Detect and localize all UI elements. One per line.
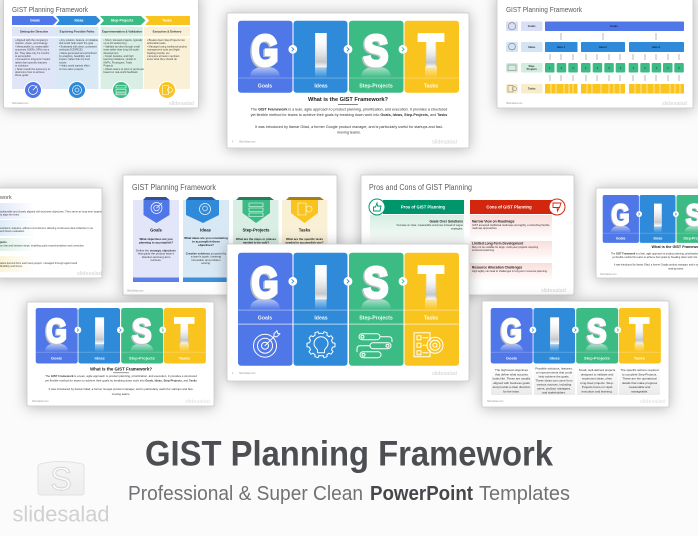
body text: It was introduced by Itamar Gilad, a former Google product manager, and is particularly useful for startups and fast- (255, 125, 444, 129)
card: tasks (282, 197, 328, 282)
column: tasks: backlog boards, etc. (147, 51, 170, 55)
column: ideas: impact, rather than by loud (59, 57, 90, 61)
description: tasks: The specific actions required (620, 368, 659, 372)
panel: front center slide, GIST with icons (227, 244, 469, 381)
GIST letter blocks (36, 308, 206, 363)
description: tasks: to complete Step-Projects. (622, 372, 657, 376)
footer: 4 (232, 140, 234, 144)
rows: solutions, features, without commitment, allowing continuous idea collection in an (0, 226, 94, 230)
watermark: slidesalad (541, 288, 566, 294)
main title: GIST Planning Framework (145, 434, 553, 474)
watermark: slidesalad (77, 271, 102, 277)
GIST letter blocks: G (46, 313, 67, 351)
cons column: GIST accepted traditional roadmaps and agility, a refreshing flexible (472, 223, 550, 227)
GIST letter blocks: G (252, 259, 278, 308)
heading: What is the GIST Framework? (308, 97, 388, 103)
body text: moving teams. (337, 131, 361, 135)
card: goals: Define the strategic objectives (136, 248, 176, 252)
GIST letter blocks: G (612, 200, 630, 232)
column: ideas: • Any solution, feature, or initiative (59, 38, 99, 42)
logo: slidesalad: slidesalad (12, 502, 110, 526)
footer (232, 371, 457, 377)
pros column: Goals Over Solutions (429, 220, 463, 224)
column: ideas: • Helps avoid wasted effort (59, 64, 90, 68)
body text: moving teams. (668, 268, 684, 270)
GIST letter blocks (238, 253, 459, 366)
body text: The GIST Framework is a lean, agile approach to product planning, prioritization, and execution. It provides a structured (45, 374, 197, 378)
row icons and labels: Step- (528, 64, 535, 68)
card: step-projects: needed to be safe? (243, 241, 269, 245)
slide title: GIST Planning Framework (132, 183, 217, 192)
column: step-projects: Projects (104, 64, 114, 68)
row icons and labels: Tasks (528, 87, 536, 91)
description: tasks: These are the operational (622, 377, 657, 381)
ideas bars: Idea 2 (599, 45, 607, 49)
slide title: Pros and Cons of GIST Planning (369, 183, 472, 192)
GIST letter blocks: Step-Projects (359, 315, 393, 321)
cons column: May not be suitable for large, multi-year projects requiring (472, 245, 539, 249)
step-project squares: 3 (656, 66, 658, 70)
pros column: strategies. (451, 226, 463, 230)
description: goals: aligned with business goals (493, 381, 530, 385)
row icons and labels (506, 22, 542, 94)
card: ideas: What ideas are you considering (184, 236, 228, 240)
column: step-projects: • Small, iterative, and high (104, 54, 134, 58)
icon: step-projects badge (112, 81, 130, 99)
GIST letter blocks: T (419, 258, 443, 307)
footer: SlideSalad.com (32, 400, 49, 403)
ideas bars: Idea 3 (652, 45, 660, 49)
icon: tasks badge (158, 81, 176, 99)
card: ideas: a team's goals, fostering (191, 255, 222, 259)
column: tasks: management tools and Agile (147, 48, 180, 52)
column: tasks: actionable tasks (147, 41, 166, 45)
ideas bars (545, 42, 684, 52)
footer: SlideSalad.com (12, 102, 29, 105)
GIST letter blocks: Goals (616, 236, 626, 240)
column: step-projects: tests rather than long full-scale (104, 48, 139, 52)
description: tasks (619, 366, 660, 395)
rows: achievable and closely aligned with business objectives. They serve as long-term targets (0, 210, 102, 214)
column: ideas: that could help reach the goal (59, 41, 93, 45)
panel: top-left slide, framework table (4, 0, 198, 108)
GIST letter blocks: S (362, 28, 387, 76)
footer: SlideSalad.com (127, 290, 144, 292)
icon: checklist target (414, 333, 443, 357)
column: goals: • Focused on long-term impact (15, 57, 50, 61)
column: goals: determine how to achieve (15, 70, 45, 74)
step-project squares: 4 (620, 66, 622, 70)
icon: goals badge (24, 81, 42, 99)
column: goals: list. They take only 12 months (15, 51, 50, 55)
column: step-projects: • Short, focused projects, typically (104, 38, 143, 42)
GIST letter blocks (238, 21, 459, 93)
column: tasks: know what they should do (147, 57, 177, 61)
card: tasks: What are the specific tasks (286, 237, 323, 241)
card: tasks: Tasks (299, 228, 311, 232)
goals bar (545, 22, 684, 31)
footer: slidesalad (432, 371, 457, 377)
icon: lightbulb gear (307, 332, 335, 358)
footer: slidesalad (169, 101, 194, 107)
GIST letter blocks: S (586, 313, 605, 351)
chevron header row: Step-Projects (111, 19, 133, 23)
step-project squares: 2 (644, 66, 646, 70)
footer: SlideSalad.com (239, 372, 256, 375)
cons column: High agility can lead to challenges in long-term resource planning. (472, 269, 548, 273)
GIST letter blocks: Step-Projects (129, 355, 156, 360)
column: ideas: • Ideas generated and prioritized (59, 51, 97, 55)
panel: far-right slide, what is GIST cropped (596, 188, 698, 278)
card: ideas: innovation and problem (191, 258, 221, 262)
body text: moving teams. (112, 392, 130, 396)
chevron header row: Ideas (75, 19, 84, 23)
footer: slidesalad (640, 399, 665, 405)
description: step-projects: Projects focus on rapid (582, 385, 613, 389)
GIST letter blocks: Ideas (314, 315, 328, 321)
column: tasks: Execution & Delivery (153, 30, 182, 34)
card: step-projects: What are the steps or phases (236, 237, 276, 241)
icon: step flow (357, 334, 392, 358)
step-project squares: 1 (633, 66, 635, 70)
footer: slidesalad (662, 101, 687, 107)
description: step-projects: long-lived projects. Step- (580, 381, 614, 385)
column: goals: to accomplish (15, 54, 31, 58)
step-project squares (545, 63, 684, 72)
pros column: Pros of GIST Planning (401, 204, 446, 210)
description: step-projects: Small, well-defined projects (579, 368, 616, 372)
card: goals: What objectives are you (139, 237, 173, 241)
GIST letter blocks: G (252, 27, 278, 76)
description: ideas: various sources, including (537, 382, 572, 386)
column: goals: • Team needs the autonomy to (15, 67, 51, 71)
column: goals: or solutions (15, 64, 29, 68)
GIST letter blocks: Tasks (424, 315, 438, 321)
GIST letter blocks: S (362, 259, 387, 308)
footer (506, 101, 687, 107)
description: step-projects: designed to validate and (581, 372, 614, 376)
column: goals: outcomes (OKRs, KPIs) not a (15, 48, 50, 52)
body text: yet flexible method for teams to achieve their goals by breaking down work into Goals, Ideas, Step-Projects, and Tasks (45, 379, 197, 383)
subtitle: Professional & Super Clean (128, 483, 363, 505)
step-project squares: 3 (608, 66, 610, 70)
card: goals (133, 197, 179, 282)
subtitle: PowerPoint (370, 483, 473, 505)
body text (251, 107, 447, 135)
cons column: Limited Long-Term Development (472, 242, 524, 246)
GIST letter blocks: S (587, 313, 607, 351)
GIST letter blocks: G (250, 259, 277, 308)
card: ideas: solving. (201, 261, 211, 265)
subtitle: Templates (479, 483, 570, 505)
footer (232, 140, 457, 146)
chevron header row: Tasks (162, 19, 172, 23)
column: goals: rather than specific features (15, 60, 48, 64)
column: step-projects: MVPs, Prototypes, Trials (104, 60, 133, 64)
description: tasks: manageable. (631, 390, 648, 394)
column: step-projects: Experimentation & Validation (102, 30, 142, 34)
GIST letter blocks: Step-Projects (584, 355, 611, 360)
pros column (369, 199, 464, 245)
rows: on fast and iterative steps, enabling quick experimentation and correction (0, 244, 84, 248)
description: ideas: help achieve the goals. (539, 374, 570, 378)
GIST letter blocks: Tasks (634, 355, 646, 360)
body text (611, 252, 698, 270)
GIST letter blocks: G (501, 313, 522, 351)
description: tasks: details that make progress (622, 381, 658, 385)
footer: SlideSalad.com (506, 102, 523, 105)
panel: top-right slide, hierarchy tree (497, 0, 693, 108)
GIST letter blocks (491, 308, 661, 363)
description: ideas: Possible solutions, features, (535, 366, 573, 370)
column: step-projects: • Validate an idea through small (104, 44, 140, 48)
column: ideas (56, 27, 99, 89)
description: ideas: users, product managers, (537, 386, 571, 390)
connectors (550, 33, 679, 81)
GIST letter blocks: Ideas (549, 355, 560, 360)
card: goals: success. (151, 258, 162, 262)
description: tasks: measurable and (629, 385, 651, 389)
row icons and labels: Projects (527, 67, 537, 71)
slide title: GIST Planning Framework (12, 5, 88, 14)
GIST letter blocks: G (611, 200, 629, 232)
footer: SlideSalad.com (487, 400, 504, 403)
panel: bottom-right slide, GIST with descriptions (482, 301, 669, 407)
card: ideas (183, 197, 229, 282)
GIST letter blocks: S (131, 313, 150, 351)
column: goals: • Aligned with the company's (15, 38, 49, 42)
column: ideas: methods (ICE/RICE) (59, 48, 83, 52)
heading: What is the GIST Framework? (90, 366, 152, 372)
GIST letter blocks: Goals (51, 355, 63, 360)
column: step-projects: based on real-world feedback (104, 70, 138, 74)
rows: and future evaluation. (0, 229, 25, 233)
GIST letter blocks: I (654, 199, 662, 230)
cons column: Resource Allocation Challenges (472, 266, 522, 270)
column: step-projects: up to 10 weeks long (104, 41, 127, 45)
step-project squares: 1 (549, 66, 551, 70)
card: goals: that guide the product team's (138, 252, 175, 256)
footer: 4 (232, 372, 234, 375)
chevron header row: Goals (30, 19, 40, 23)
GIST letter blocks: T (419, 26, 443, 75)
column: ideas: • Evaluated with clear, consistent (59, 44, 97, 48)
card: ideas: to accomplish these (192, 240, 220, 244)
panel: mid-right slide, pros and cons (361, 175, 574, 295)
rows: tasks derived from each step-project, managed through agile board (0, 261, 78, 265)
body text: It was introduced by Itamar Gilad, a former Google product manager, and is particularly useful for startups and fast- (49, 387, 193, 391)
GIST letter blocks: Goals (506, 355, 518, 360)
footer (487, 399, 665, 405)
row icons and labels: Ideas (528, 45, 536, 49)
column: tasks: • Breaks down Step-Projects into (147, 38, 185, 42)
step-project squares: 5 (678, 66, 680, 70)
card: goals: direction and long-term (142, 255, 171, 259)
description: ideas: or improvements that could (536, 370, 572, 374)
step-project squares: 2 (561, 66, 563, 70)
panel: far-left slide, cropped list (0, 188, 102, 278)
description: goals: looks like. These are usually (493, 377, 531, 381)
step-project squares: 1 (585, 66, 587, 70)
GIST letter blocks: S (132, 313, 152, 351)
logo: slidesalad (12, 461, 110, 526)
panel: top-center slide, what is GIST (227, 13, 469, 148)
description: step-projects: execution and learning. (581, 390, 613, 394)
column: ideas: Exploring Possible Paths (60, 30, 95, 34)
column: goals: these goals (15, 73, 29, 77)
column: goals: Setting the Direction (20, 30, 48, 34)
GIST letter blocks: T (630, 312, 649, 350)
step-project squares: 4 (667, 66, 669, 70)
slide title: GIST Planning Framework (506, 5, 582, 14)
body text: The GIST Framework is a lean, agile approach to product planning, prioritization, and execution. It provides a structured (251, 107, 447, 111)
column: ideas: on low-value projects (59, 67, 84, 71)
column: step-projects: learning initiatives, similar to (104, 57, 136, 61)
row icons and labels: Goals (528, 24, 536, 28)
cons column: Cons of GIST Planning (486, 204, 532, 210)
column: goals: • Measurable, by measurable (15, 44, 49, 48)
footer: slidesalad (432, 140, 457, 146)
GIST letter blocks: S (364, 259, 388, 308)
card: step-projects: Step-Projects (242, 228, 270, 232)
description: step-projects: implement ideas, often (582, 377, 612, 381)
GIST letter blocks (603, 195, 698, 243)
card: ideas: Creative solutions proposed by (186, 252, 226, 256)
footer: SlideSalad.com (600, 273, 617, 276)
description: ideas: and stakeholders. (542, 390, 566, 394)
icon: target (254, 331, 280, 357)
card: ideas: objectives? (198, 243, 214, 247)
GIST letter blocks: Ideas (94, 355, 105, 360)
GIST letter blocks: G (250, 28, 277, 76)
GIST letter blocks: S (364, 27, 388, 76)
icon: ideas badge (68, 81, 86, 99)
GIST letter blocks: Goals (258, 315, 272, 321)
GIST letter blocks: Tasks (179, 355, 191, 360)
card: ideas: Ideas (200, 228, 212, 232)
GIST letter blocks: Tasks (424, 83, 438, 89)
step-project squares: 2 (597, 66, 599, 70)
GIST letter blocks: G (45, 313, 66, 351)
GIST letter blocks: G (500, 313, 521, 351)
description: goals: for the team. (503, 390, 520, 394)
body text (45, 374, 197, 396)
column: tasks (144, 27, 190, 89)
column: ideas: by analytics, feasibility, and (59, 54, 91, 58)
rows: to align the team. (0, 212, 20, 216)
footer: SlideSalad.com (239, 140, 256, 144)
rows: flexibility and focus. (0, 264, 23, 268)
description: ideas (534, 366, 575, 395)
column: goals: mission, vision, and strategy (15, 41, 48, 45)
chevron header row (12, 16, 190, 25)
column: step-projects: • Allows teams to pivot or persevere (104, 67, 145, 71)
column: ideas: voices (59, 60, 67, 64)
description: goals (491, 366, 532, 395)
description: step-projects (577, 366, 618, 395)
description: goals: that define what success (495, 372, 528, 376)
GIST letter blocks: I (95, 313, 104, 349)
cons column: Narrow View on Roadmaps (472, 220, 515, 224)
logo: slidesalad: S (50, 461, 72, 497)
card: goals: Goals (150, 228, 162, 232)
rows (0, 203, 102, 272)
footer (32, 399, 210, 405)
GIST letter blocks: Ideas (314, 83, 328, 89)
subtitle (128, 483, 570, 505)
column: step-projects (100, 27, 145, 89)
footer (12, 101, 194, 107)
body text: yet flexible method for teams to achieve their goals by breaking down work into Goals, Ideas, Step-Projects, and Tasks (251, 113, 447, 117)
footer: slidesalad (185, 399, 210, 405)
card: step-projects (233, 197, 278, 282)
panel: bottom-left slide, what is GIST (27, 302, 214, 406)
column: tasks: • Managed using traditional project (147, 44, 187, 48)
cons column (470, 199, 565, 281)
column: goals (12, 27, 56, 89)
cons column: structured planning. (472, 248, 495, 252)
card: tasks: needed to accomplish one? (285, 241, 324, 245)
ideas bars: Idea 1 (557, 45, 565, 49)
GIST letter blocks: Goals (258, 83, 272, 89)
GIST letter blocks: I (315, 27, 327, 74)
cons column: roadmap approaches. (472, 226, 498, 230)
goals bar: Goals (610, 24, 618, 28)
pros column: Focuses on clear, measurable outcomes instead of vague (397, 223, 464, 227)
step-project squares: 3 (572, 66, 574, 70)
GIST letter blocks: I (550, 313, 559, 349)
card: goals: planning to accomplish? (139, 241, 173, 245)
GIST letter blocks: Step-Projects (359, 83, 393, 89)
description: goals: and provide a clear direction (493, 385, 531, 389)
GIST letter blocks: I (315, 259, 327, 306)
description: ideas: These ideas can come from (535, 378, 573, 382)
description: goals: The high-level objectives (495, 368, 529, 372)
column: tasks: • Ensures all team members (147, 54, 180, 58)
GIST letter blocks: Ideas (653, 236, 662, 240)
tasks stripes (545, 84, 684, 94)
rows: jects (0, 240, 7, 244)
panel: mid-left slide, ribbon cards (123, 175, 337, 295)
column: step-projects: development (104, 51, 119, 55)
GIST letter blocks: T (175, 312, 194, 350)
